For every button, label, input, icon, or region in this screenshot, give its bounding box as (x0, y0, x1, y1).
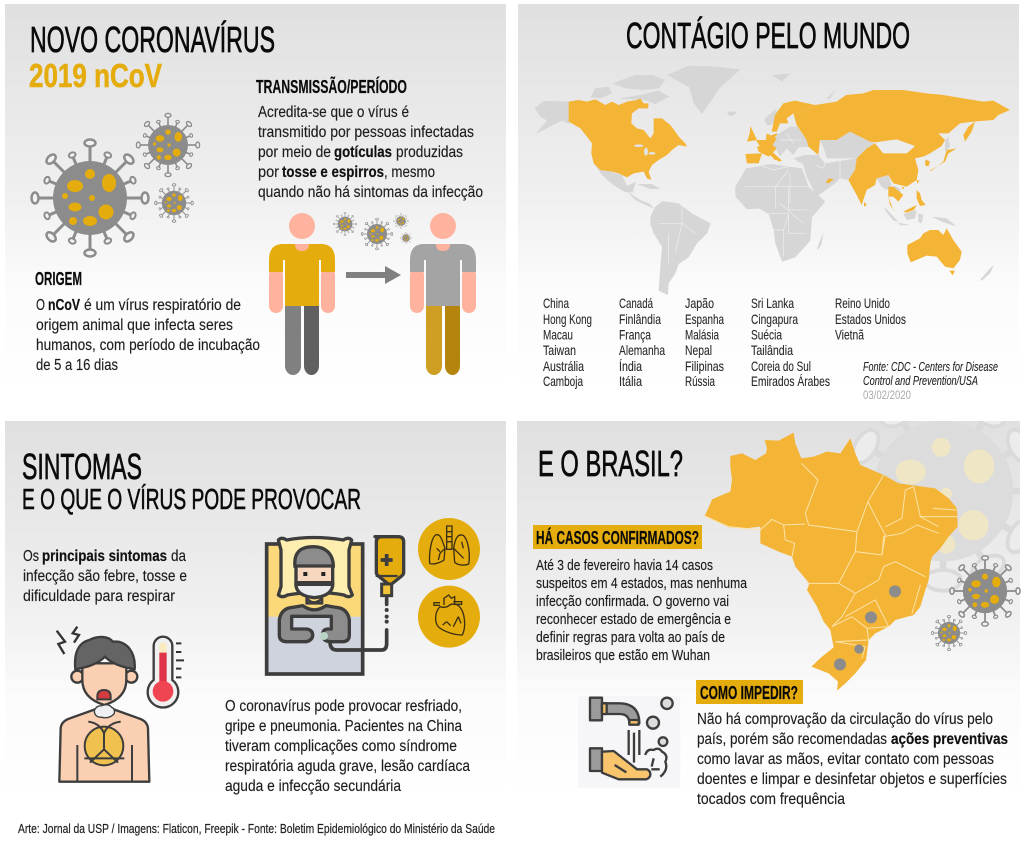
text block: suspected cases (536, 557, 748, 664)
text block: main symptoms: infecção são febre, tosse e (23, 568, 187, 585)
panel: contágio pelo mundo (518, 4, 1019, 402)
text block: suspected cases: suspeitos em 4 estados, mas nenhuma (536, 575, 748, 592)
list of countries: Estados Unidos (835, 311, 906, 327)
text block: prevention: tocados com frequência (697, 791, 845, 808)
list of countries: Espanha (685, 311, 724, 327)
text block: origin: nCoV (48, 297, 80, 314)
list of countries: Emirados Árabes (751, 373, 830, 389)
text block: suspected cases: definir regras para volta ao país de (536, 629, 725, 646)
list of countries: Alemanha (619, 342, 665, 358)
text block: main symptoms: da (171, 548, 186, 565)
list of countries: Taiwan (543, 342, 576, 358)
title: sintomas: SINTOMAS (22, 446, 142, 487)
text block: prevention: país, porém são recomendadas (697, 731, 887, 748)
list of countries: França (619, 326, 651, 342)
list of countries: Suécia (751, 326, 782, 342)
text block: complications: aguda e infecção secundária (225, 778, 401, 795)
map: americas, africa and western europe (535, 66, 825, 295)
list of countries: Itália (619, 373, 642, 389)
text block: transmission: produzidas (396, 144, 463, 161)
text block: complications: gripe e pneumonia. Pacientes na China (225, 718, 462, 735)
title: novo coronavírus: NOVO CORONAVÍRUS (30, 19, 275, 60)
list of countries: Vietnã (835, 326, 864, 342)
text block: transmission: , mesmo (384, 164, 435, 181)
list of countries: Canadá (619, 295, 653, 311)
label: há casos confirmados (533, 525, 702, 549)
panel: sintomas (5, 421, 506, 801)
text block: prevention (697, 711, 1008, 808)
list of countries: Austrália (543, 358, 584, 374)
text block: main symptoms: principais sintomas (42, 548, 167, 565)
panel: novo coronavírus (5, 4, 506, 394)
list of countries (543, 295, 906, 389)
heading: origem: ORIGEM (35, 269, 82, 289)
icon: large virus (32, 140, 148, 256)
list of countries: Coreia do Sul (751, 358, 811, 374)
text block: origin: de 5 a 16 dias (36, 357, 118, 374)
icon: sick man (57, 627, 149, 782)
source note (863, 359, 998, 402)
text block: complications: respiratória aguda grave, lesão cardíaca (225, 758, 470, 775)
icon: healthy person (410, 213, 476, 375)
icon: virus medium (950, 556, 1020, 626)
text block: transmission: transmitido por pessoas infectadas (258, 124, 474, 141)
text block: origin: O (36, 297, 45, 314)
label: como impedir: COMO IMPEDIR? (700, 683, 798, 703)
text block: suspected cases: reconhecer estado de emergência e (536, 611, 731, 628)
list of countries: Camboja (543, 373, 583, 389)
list of countries: Índia (619, 358, 642, 374)
subtitle: 2019 nCoV: 2019 nCoV (29, 57, 162, 94)
world map (535, 66, 1010, 295)
label: como impedir (696, 680, 803, 704)
list of countries: Reino Unido (835, 295, 890, 311)
list of countries: China (543, 295, 569, 311)
text block: transmission: Acredita-se que o vírus é (258, 104, 409, 121)
icon: hand washing (578, 696, 680, 788)
list of countries: Rússia (685, 373, 715, 389)
map of Brazil (705, 433, 958, 691)
list of countries: Malásia (685, 326, 719, 342)
list of countries: Nepal (685, 342, 712, 358)
text block: main symptoms (23, 548, 187, 605)
list of countries: Filipinas (685, 358, 724, 374)
text block: suspected cases: brasileiros que estão em Wuhan (536, 647, 710, 664)
text block: transmission: gotículas (334, 144, 392, 161)
icon: thermometer (148, 637, 184, 707)
credits: Arte: Jornal da USP / Imagens: Flaticon, Freepik - Fonte: Boletim Epidemiológico do Ministério da Saúde (18, 821, 495, 836)
text block: transmission: por meio de (258, 144, 331, 161)
icon: medium virus (136, 113, 200, 177)
text block: transmission (258, 104, 483, 201)
source note: Control and Prevention/USA (863, 373, 978, 388)
map: eurasia and oceania (753, 90, 1010, 281)
label: há casos confirmados: HÁ CASOS CONFIRMADOS? (536, 527, 699, 548)
list of countries: Sri Lanka (751, 295, 794, 311)
arrow: transmission (346, 266, 401, 284)
icon: virus small (931, 615, 967, 651)
source note: 03/02/2020 (863, 388, 911, 402)
text block: origin: origem animal que infecta seres (36, 317, 233, 334)
text block: suspected cases: infecção confirmada. O governo vai (536, 593, 729, 610)
list of countries: Cingapura (751, 311, 798, 327)
text block: transmission: quando não há sintomas da infecção (258, 184, 483, 201)
icon: patient in hospital bed with IV (267, 537, 404, 674)
icon: small virus (155, 184, 193, 222)
text block: complications (225, 698, 470, 795)
text block: main symptoms: dificuldade para respirar (23, 588, 176, 605)
text block: origin: humanos, com período de incubação (36, 337, 260, 354)
heading: transmissão/período: TRANSMISSÃO/PERÍODO (256, 76, 407, 97)
decorative pale virus background (854, 421, 1020, 592)
icon: airborne virus particles (333, 212, 412, 250)
text block: transmission: tosse e espirros (282, 164, 384, 181)
text block: complications: tiveram complicações como síndrome (225, 738, 457, 755)
title: e o brasil: E O BRASIL? (538, 443, 683, 484)
text block: main symptoms: Os (23, 548, 39, 565)
list of countries: Japão (685, 295, 714, 311)
list of countries: Tailândia (751, 342, 793, 358)
list of countries: Finlândia (619, 311, 661, 327)
list of countries: Macau (543, 326, 573, 342)
text block: transmission: por (258, 164, 280, 181)
subtitle: e o que o vírus pode provocar: E O QUE O VÍRUS PODE PROVOCAR (22, 483, 361, 516)
icon: infected person (269, 213, 335, 375)
text block: origin: é um vírus respiratório de (84, 297, 241, 314)
text block: origin (36, 297, 260, 374)
icon: lungs (418, 518, 480, 580)
icon: heart (418, 586, 480, 648)
panel: e o brasil (517, 391, 1024, 808)
text block: suspected cases: Até 3 de fevereiro havia 14 casos (536, 557, 713, 574)
list of countries: Hong Kong (543, 311, 592, 327)
text block: complications: O coronavírus pode provocar resfriado, (225, 698, 462, 715)
